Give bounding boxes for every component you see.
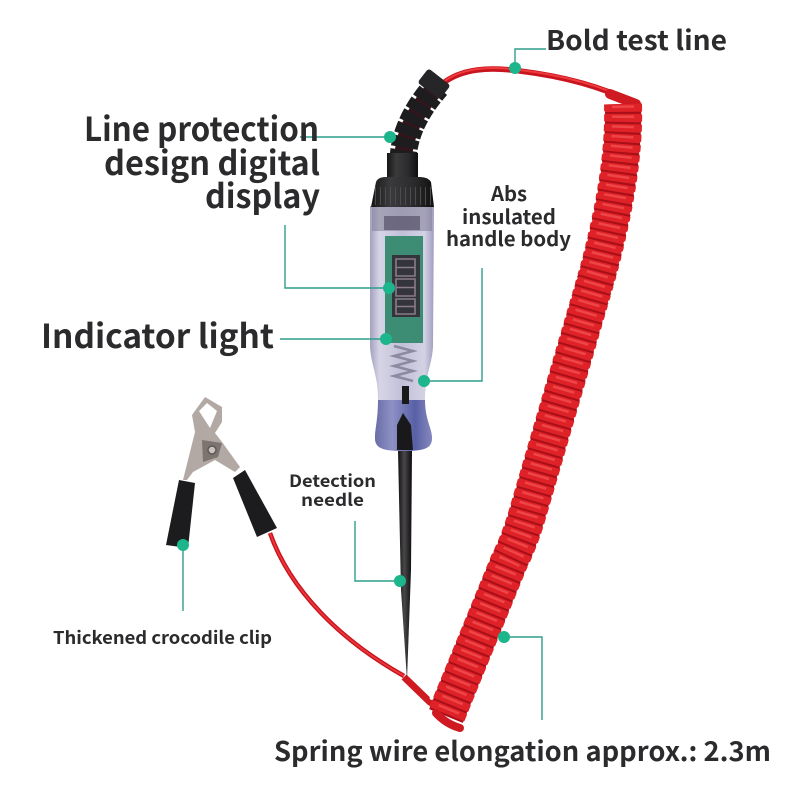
callout: thickened crocodile clip: Thickened crocodile clip [53, 625, 272, 650]
spring coil wire [428, 94, 643, 728]
callout: bold test line: Bold test line [546, 19, 727, 58]
callout: display leader [285, 225, 395, 294]
callout: detection needle: Detection [289, 467, 376, 492]
spring inside handle [394, 346, 413, 381]
callout: detection needle: needle [301, 486, 364, 511]
callout: spring wire elongation: Spring wire elongation approx.: 2.3m [274, 730, 771, 769]
callout: ABS insulated handle body [418, 178, 572, 387]
callout: spring wire elongation [274, 631, 771, 769]
callout: ABS insulated handle body: Abs [490, 178, 527, 207]
red test wire, upper section [442, 68, 632, 102]
callout: line protection design digital display: display [205, 170, 320, 218]
callout: indicator light [41, 310, 392, 358]
inner contact [397, 386, 413, 450]
strain relief, black ribbed sleeve [403, 86, 437, 160]
metal jaws [183, 397, 240, 480]
circuit board [385, 236, 423, 343]
callout: detection needle [289, 467, 406, 587]
digital display [392, 255, 420, 317]
callout: line protection design digital display: Line protection [84, 103, 319, 151]
callout: indicator light: Indicator light [41, 310, 274, 358]
strain relief end collar [417, 68, 451, 100]
callout: ABS insulated handle body: insulated [462, 201, 556, 230]
needle [398, 450, 412, 680]
callout: line protection design digital display: design digital [104, 137, 320, 185]
right insulating sleeve [233, 470, 277, 537]
black threaded cap and neck [371, 153, 434, 207]
callout: thickened crocodile clip [53, 539, 272, 650]
callout: line protection design digital display [84, 103, 396, 218]
callout: bold test line [509, 19, 727, 74]
callout: ABS insulated handle body: handle body [446, 223, 572, 252]
crocodile clip [166, 397, 277, 548]
red test wire, lower section to clip [270, 533, 434, 706]
left insulating sleeve [166, 480, 195, 548]
handle body, transparent ABS [370, 206, 434, 451]
